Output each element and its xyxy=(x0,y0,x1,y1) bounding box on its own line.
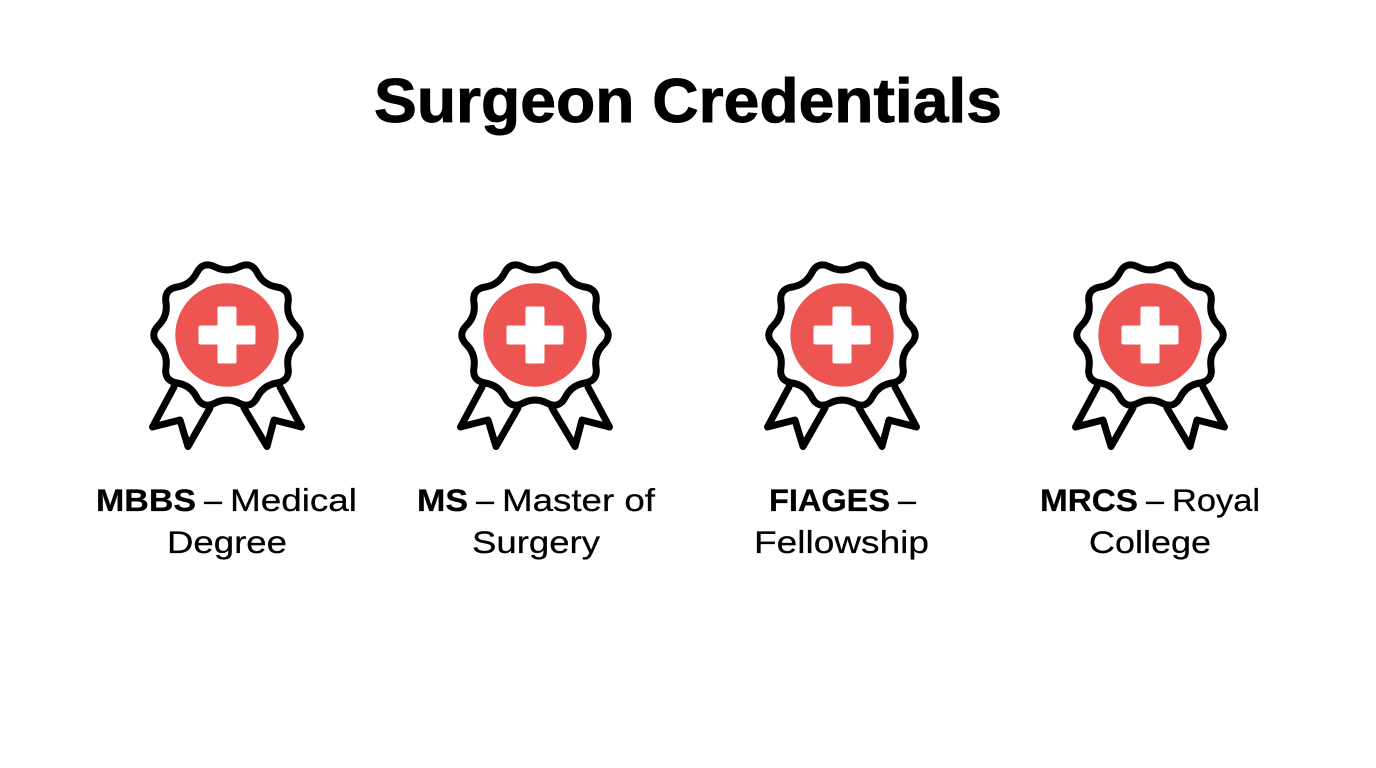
label: MS: Surgery xyxy=(472,524,600,560)
label: FIAGES: Fellowship xyxy=(754,524,929,560)
label: MRCS: Royal xyxy=(1172,482,1260,518)
icon: FIAGES rosette badge xyxy=(768,265,916,446)
label: MRCS: MRCS xyxy=(1040,482,1138,518)
label: FIAGES: FIAGES xyxy=(769,482,890,518)
icon: MS rosette badge xyxy=(460,265,610,446)
credential: MBBS xyxy=(96,265,357,560)
icon: MRCS rosette badge xyxy=(1076,265,1224,446)
label: MRCS: College xyxy=(1089,524,1211,560)
title: Surgeon Credentials xyxy=(374,67,1002,136)
label: MBBS: Degree xyxy=(167,524,287,560)
icon: MBBS rosette badge xyxy=(152,265,302,446)
label: MS: MS xyxy=(417,482,468,518)
label: MS: – xyxy=(476,482,494,518)
label: MBBS: Medical xyxy=(230,482,357,518)
credential: MRCS xyxy=(1040,265,1260,560)
label: MBBS: MBBS xyxy=(96,482,196,518)
label: MS: Master of xyxy=(502,482,655,518)
label: MBBS: – xyxy=(204,482,222,518)
label: MRCS: – xyxy=(1146,482,1164,518)
credential: MS xyxy=(417,265,655,560)
credential: FIAGES xyxy=(754,265,929,560)
label: FIAGES: – xyxy=(898,482,916,518)
